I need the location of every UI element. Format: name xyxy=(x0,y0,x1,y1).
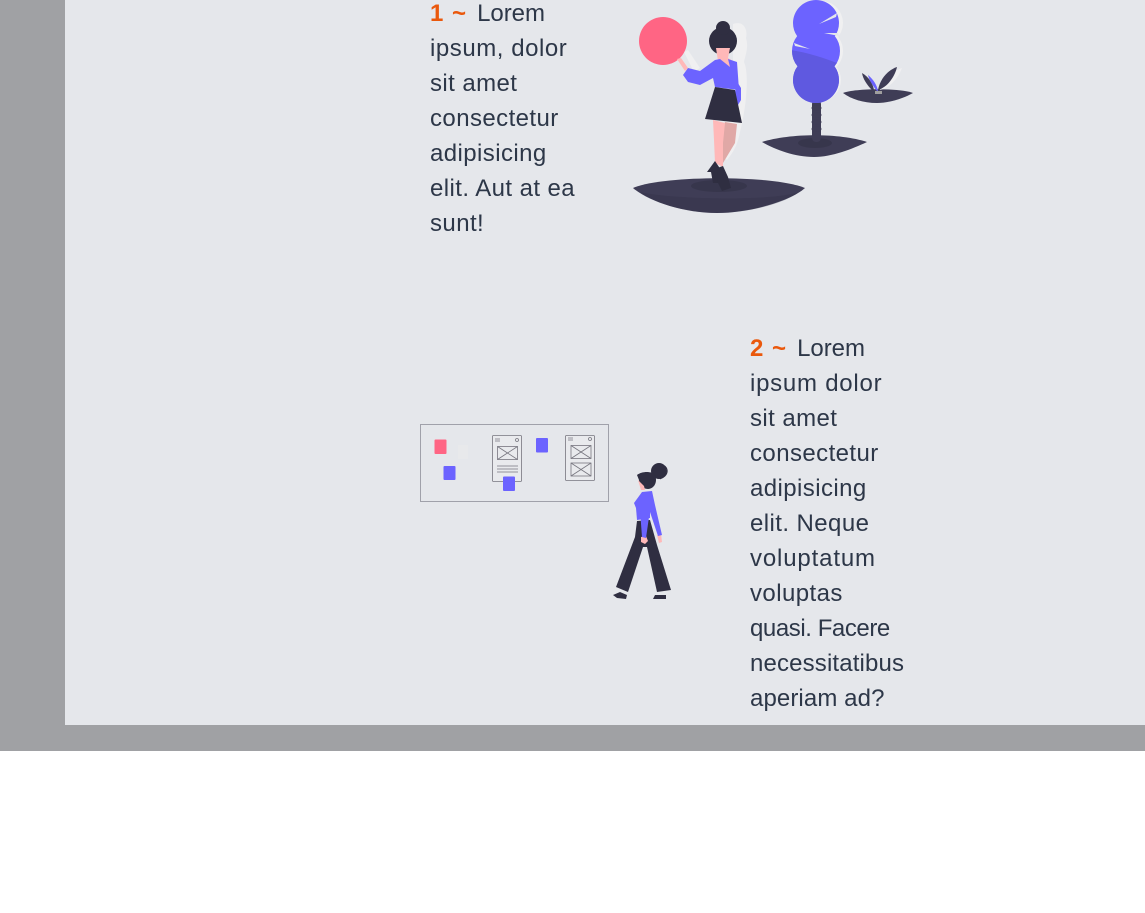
icon: purple tree on island xyxy=(762,0,867,157)
text block: step 2: quasi. Facere xyxy=(750,615,890,642)
wireframe board xyxy=(420,424,608,502)
icon: small plant on island xyxy=(843,67,913,103)
text block: step 2: sit amet xyxy=(750,405,837,432)
figure shadow xyxy=(722,23,747,160)
face xyxy=(716,48,733,68)
hair xyxy=(709,27,737,55)
text block: step 1: elit. Aut at ea xyxy=(430,175,575,202)
text block: step 2: voluptatum xyxy=(750,545,876,572)
bumpy trunk xyxy=(812,100,822,142)
text block: step 2 xyxy=(750,335,904,712)
balloon xyxy=(639,17,687,65)
text block: step 2: aperiam ad? xyxy=(750,685,885,712)
text block: step 1: adipisicing xyxy=(430,140,547,167)
text block: step 2: ipsum dolor xyxy=(750,370,882,397)
wireframe card: right xyxy=(566,436,594,480)
text block: step 1: consectetur xyxy=(430,105,559,132)
foliage shadow xyxy=(799,1,843,45)
shirt xyxy=(634,491,662,536)
text block: step 2: necessitatibus xyxy=(750,650,904,677)
panel: content area xyxy=(65,0,1145,725)
foliage xyxy=(790,0,842,105)
shirt xyxy=(683,59,739,90)
text block: step 2: elit. Neque xyxy=(750,510,869,537)
wireframe card: left xyxy=(492,436,522,482)
text block: step 2: 2 ~ Lorem xyxy=(750,335,865,362)
text block: step 2: consectetur xyxy=(750,440,879,467)
icon: large floating island xyxy=(633,178,805,213)
boots xyxy=(707,161,720,183)
sticky notes xyxy=(434,438,548,491)
illustration: woman with balloon and plants xyxy=(633,0,913,213)
hands xyxy=(641,536,648,544)
text block: step 1: 1 ~ Lorem xyxy=(430,0,545,27)
text block: step 2: voluptas xyxy=(750,580,843,607)
legs xyxy=(719,122,737,163)
shoes xyxy=(613,592,627,599)
icon: walking woman xyxy=(613,463,671,599)
icon: woman holding balloon xyxy=(639,17,747,191)
skirt xyxy=(705,87,742,123)
text block: step 1: sit amet xyxy=(430,70,517,97)
hand xyxy=(677,58,688,71)
text block: step 1: sunt! xyxy=(430,210,484,237)
text block: step 1: ipsum, dolor xyxy=(430,35,567,62)
text block: step 1 xyxy=(430,0,575,237)
text block: step 2: adipisicing xyxy=(750,475,867,502)
trousers xyxy=(616,520,671,592)
